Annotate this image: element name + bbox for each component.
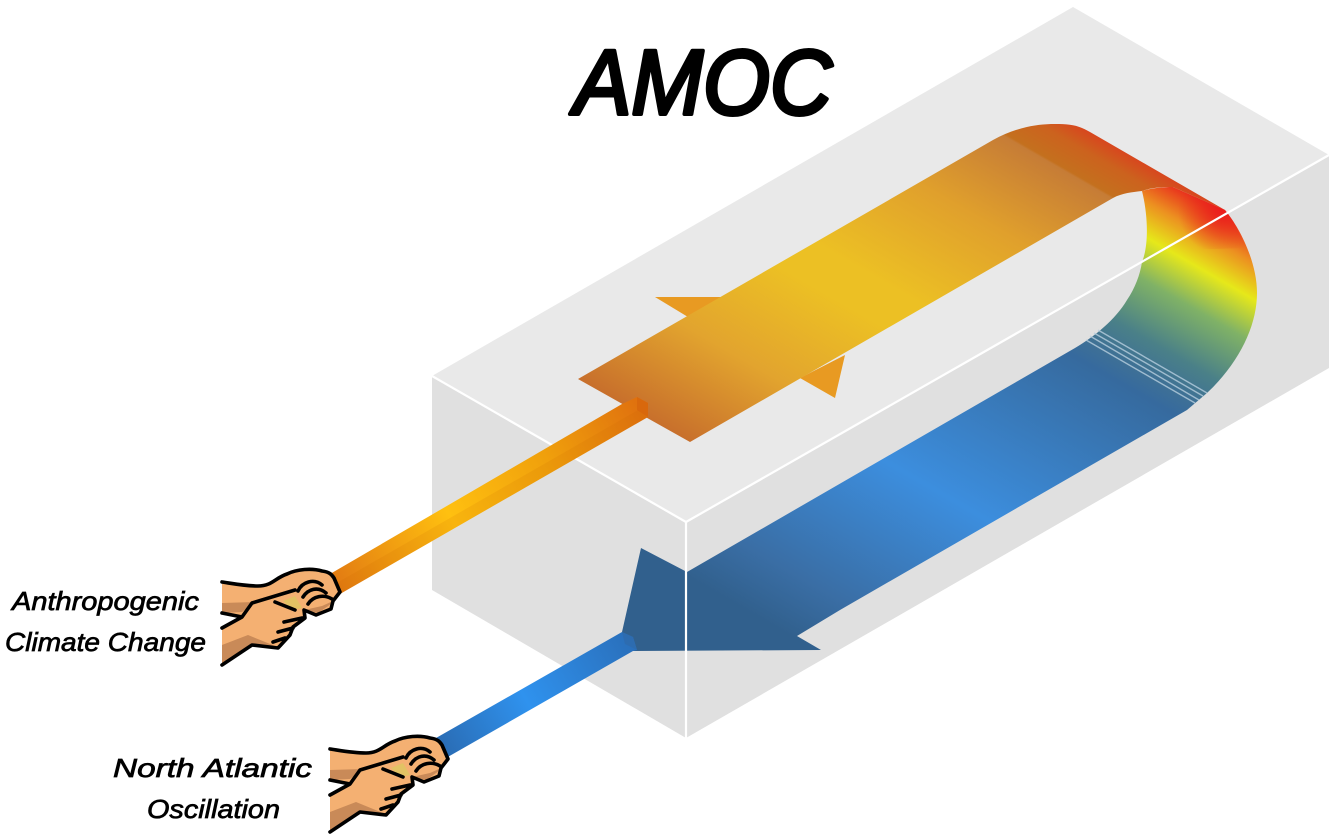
box right face — [686, 155, 1329, 738]
label: Anthropogenic Climate Change: Anthropogenic — [10, 586, 199, 616]
title: AMOC — [569, 32, 833, 134]
label: Anthropogenic Climate Change — [5, 586, 206, 657]
box front face — [432, 376, 686, 738]
label: North Atlantic Oscillation — [113, 753, 312, 824]
rope body — [330, 397, 648, 594]
label: North Atlantic Oscillation: North Atlantic — [113, 753, 312, 783]
rope body — [436, 632, 637, 758]
icon: hands pulling orange rope — [222, 569, 340, 665]
arrow fins: upper arrowhead — [655, 297, 845, 398]
stripes on bend — [1086, 330, 1207, 403]
surface warm flow ribbon — [578, 124, 1225, 442]
white box edges — [432, 155, 1329, 738]
box top face — [432, 7, 1329, 522]
blue rope — [436, 632, 637, 758]
icon: hands pulling blue rope — [330, 736, 448, 832]
deep blue return flow and rainbow bend — [622, 187, 1257, 651]
orange rope — [330, 397, 648, 594]
rope lower facet — [335, 404, 648, 594]
box: ocean block — [432, 7, 1329, 738]
red hot corner — [1166, 187, 1246, 250]
label: North Atlantic Oscillation: Oscillation — [147, 794, 280, 824]
label: Anthropogenic Climate Change: Climate Change — [5, 627, 206, 657]
